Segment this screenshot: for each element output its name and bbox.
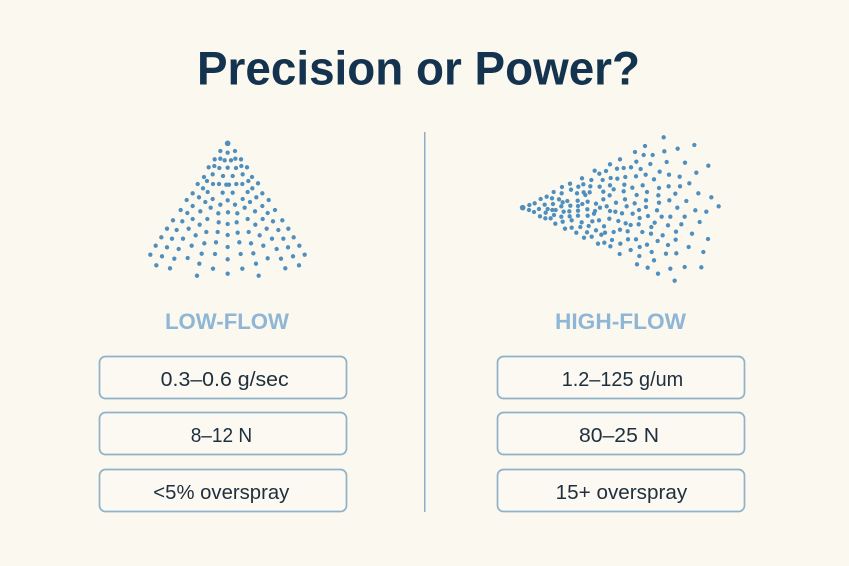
heading: high-flow: HIGH-FLOW [555, 309, 687, 334]
stat box: force [498, 412, 744, 454]
stat box: overspray: <5% overspray [153, 481, 290, 504]
stat box: flow rate [100, 356, 346, 398]
stat box: force: 80–25 N [579, 424, 659, 447]
stat box: force: 8–12 N [191, 424, 252, 447]
title: Precision or Power? [197, 42, 640, 94]
stat box: flow rate: 1.2–125 g/um [562, 368, 683, 391]
stat box: force [100, 412, 346, 454]
center divider [424, 132, 426, 512]
stat box: overspray [100, 470, 346, 512]
stat box: flow rate [498, 356, 744, 398]
heading: low-flow: LOW-FLOW [165, 309, 290, 334]
stat box: overspray [498, 470, 744, 512]
chart: low-flow spray cone of dots [148, 140, 307, 278]
chart: high-flow spray cone of dots [520, 135, 721, 283]
stat box: overspray: 15+ overspray [556, 481, 688, 504]
panel: high-flow [498, 135, 744, 511]
panel: low-flow [100, 140, 346, 512]
stat box: flow rate: 0.3–0.6 g/sec [161, 368, 289, 391]
